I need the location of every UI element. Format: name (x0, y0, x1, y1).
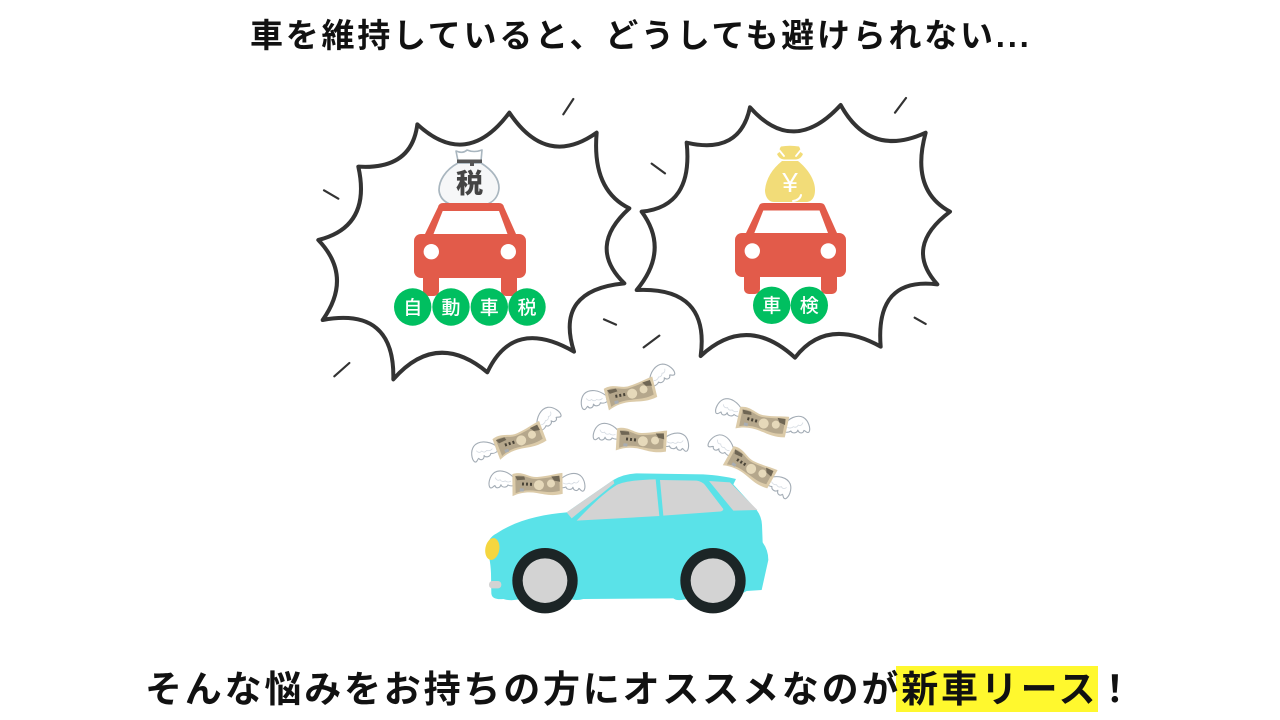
flying banknote 4 (592, 422, 690, 458)
flying banknote 1 (576, 358, 680, 415)
icon: tax money bag: 税 (456, 169, 483, 199)
flying banknote 2 (463, 400, 569, 468)
label: 自動車税: 税 (517, 297, 537, 319)
icon: yen money bag: ¥ (781, 167, 798, 198)
highlight band (896, 666, 1098, 712)
label: 車検 (753, 287, 828, 324)
label: 自動車税 (394, 288, 546, 326)
teal car (484, 473, 768, 613)
label: 自動車税: 車 (480, 297, 499, 319)
flying banknote 5 (712, 392, 814, 447)
label: 自動車税: 自 (403, 297, 422, 319)
label: 自動車税: 動 (441, 297, 461, 319)
icon: red car left (414, 203, 526, 296)
speech burst: automobile tax (318, 99, 629, 379)
icon: tax money bag (439, 150, 499, 207)
bottom message: そんな悩みをお持ちの方にオススメなのが新車リース！ (145, 669, 1136, 710)
speech burst: vehicle inspection (637, 98, 950, 358)
label: 車検: 検 (800, 295, 819, 317)
flying banknote 6 (702, 431, 797, 503)
icon: yen money bag (765, 146, 815, 202)
icon: red car right (735, 203, 846, 294)
label: 車検: 車 (762, 295, 781, 317)
title: 車を維持していると、どうしても避けられない... (250, 17, 1032, 54)
flying banknote 3 (489, 470, 585, 499)
